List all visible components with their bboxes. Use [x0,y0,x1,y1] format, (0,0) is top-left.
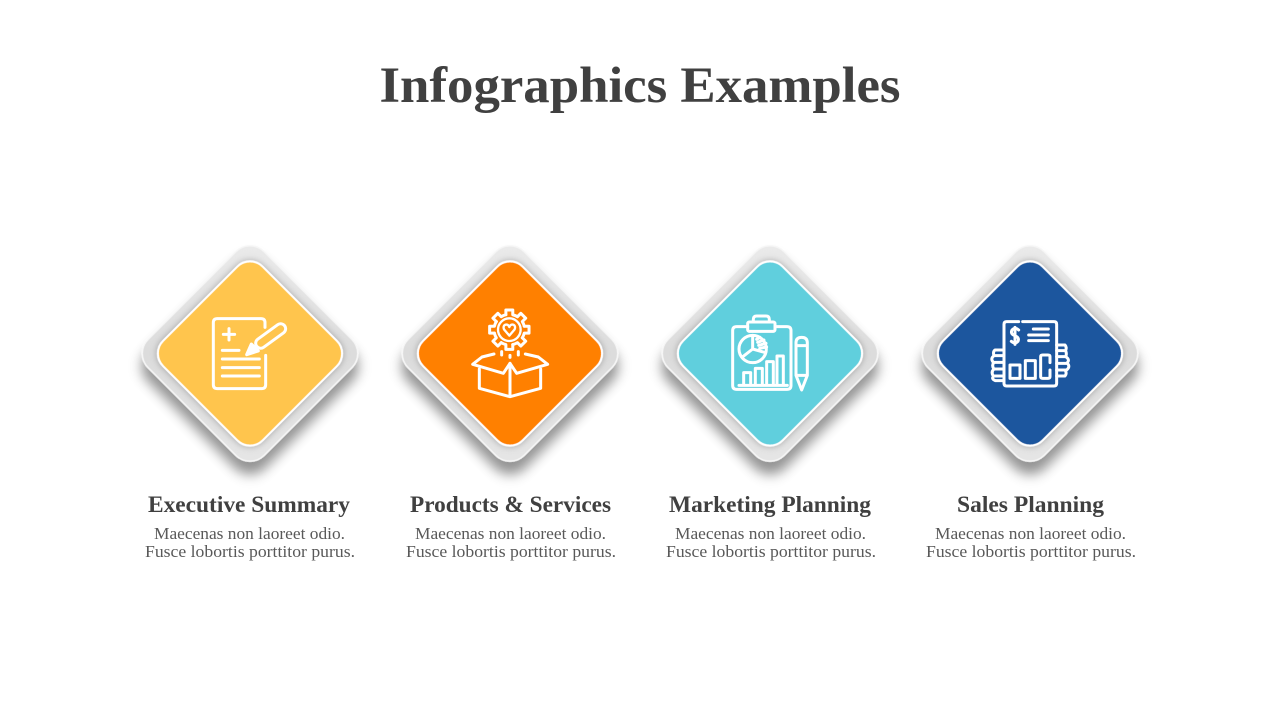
diamond: blue [914,238,1146,469]
diamond: yellow [134,238,366,469]
description: Fusce lobortis porttitor purus. [926,542,1136,561]
diamond: teal [654,238,886,469]
panel: marketing planning [654,238,886,561]
heading: Sales Planning [957,492,1105,517]
description: Fusce lobortis porttitor purus. [145,542,355,561]
title: Infographics Examples [380,58,900,114]
icon: document with pen [213,319,288,389]
description: Maecenas non laoreet odio. [415,524,606,543]
description: Fusce lobortis porttitor purus. [666,542,876,561]
heading: Products & Services [410,492,611,517]
description: Maecenas non laoreet odio. [675,524,866,543]
icon: gear over open box [473,310,548,397]
icon: clipboard with charts and pencil [733,316,807,390]
diamond: orange [394,238,626,469]
heading: Marketing Planning [669,492,872,517]
heading: Executive Summary [148,492,351,517]
panel: executive summary [134,238,366,561]
description: Maecenas non laoreet odio. [935,524,1126,543]
panel: products and services [394,238,626,561]
description: Fusce lobortis porttitor purus. [406,542,616,561]
icon: financial report with coins [992,322,1069,386]
panel: sales planning [914,238,1146,561]
description: Maecenas non laoreet odio. [154,524,345,543]
